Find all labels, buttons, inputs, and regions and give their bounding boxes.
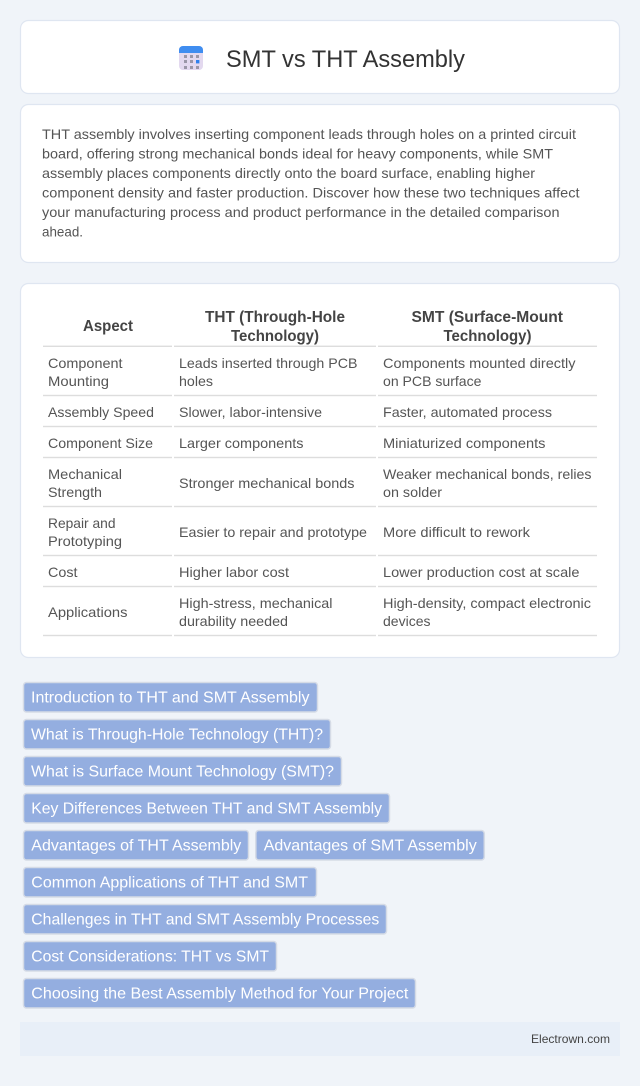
table row: mechanical strength: Strength — [48, 484, 102, 500]
text block: introduction paragraph: board, offering strong mechanical bonds ideal for heavy components, while SMT — [42, 146, 553, 162]
table row: repair and prototyping: More difficult to rework — [383, 524, 531, 540]
table row: repair and prototyping: Easier to repair and prototype — [179, 524, 367, 540]
table row: component size — [48, 435, 546, 451]
panel: introduction — [20, 104, 620, 262]
tag: introduction — [24, 682, 318, 712]
panel: comparison table — [20, 284, 620, 658]
table row: mechanical strength: Mechanical — [48, 466, 122, 482]
text block: introduction paragraph: component density and faster production. Discover how these two techniques affect — [42, 184, 580, 200]
text block: introduction paragraph: your manufacturing process and product performance in the detailed comparison — [42, 204, 560, 220]
table row: component size: Larger components — [179, 435, 304, 451]
table row: assembly speed: Faster, automated process — [383, 404, 552, 420]
tag: challenges — [24, 904, 386, 934]
table row: component mounting: Mounting — [48, 373, 109, 389]
table header row: SMT (Surface-Mount — [412, 309, 564, 326]
tag: what is SMT — [24, 756, 342, 786]
table row: mechanical strength — [48, 466, 592, 500]
table row: component size: Component Size — [48, 435, 153, 451]
footer: Electrown.com — [531, 1032, 610, 1046]
tag: introduction: Introduction to THT and SMT Assembly — [31, 690, 310, 706]
table row: mechanical strength: Weaker mechanical bonds, relies — [383, 466, 592, 482]
table row: component mounting: Leads inserted through PCB — [179, 355, 358, 371]
tag: advantages of THT — [24, 830, 248, 860]
table row: repair and prototyping: Prototyping — [48, 533, 122, 549]
table row: component mounting: Component — [48, 355, 123, 371]
table row: applications: durability needed — [179, 613, 288, 629]
table row: applications — [48, 595, 591, 629]
table row: applications: Applications — [48, 604, 128, 620]
table row: mechanical strength: Stronger mechanical bonds — [179, 475, 354, 491]
table row: component mounting: on PCB surface — [383, 373, 482, 389]
table row: repair and prototyping — [48, 515, 531, 549]
tag: what is SMT: What is Surface Mount Technology (SMT)? — [31, 764, 334, 780]
table row: cost: Cost — [48, 564, 78, 580]
table row: assembly speed — [48, 404, 552, 420]
tag: common applications — [24, 868, 316, 897]
tag: choosing the best method — [24, 978, 416, 1008]
title: SMT vs THT Assembly — [226, 46, 465, 73]
tag: key differences: Key Differences Between THT and SMT Assembly — [31, 800, 382, 818]
table row: component size: Miniaturized components — [383, 435, 546, 451]
text block: introduction paragraph — [42, 126, 580, 240]
table row: assembly speed: Assembly Speed — [48, 404, 154, 420]
icon: calendar grid — [179, 46, 203, 70]
tag: advantages of THT: Advantages of THT Assembly — [31, 838, 241, 854]
tag: key differences — [24, 794, 390, 823]
tag: choosing the best method: Choosing the Best Assembly Method for Your Project — [31, 986, 409, 1002]
table row: applications: devices — [383, 613, 430, 629]
table header row: THT (Through-Hole — [205, 309, 345, 326]
panel: section links — [24, 682, 484, 1008]
table row: cost: Higher labor cost — [179, 564, 289, 580]
text block: introduction paragraph: THT assembly involves inserting component leads through holes on a printed circuit — [42, 126, 576, 142]
table row: applications: High-density, compact electronic — [383, 595, 591, 611]
table row: mechanical strength: on solder — [383, 484, 442, 500]
tag: what is THT — [24, 720, 330, 749]
tag: common applications: Common Applications of THT and SMT — [31, 874, 308, 892]
footer — [20, 1022, 620, 1056]
table row: repair and prototyping: Repair and — [48, 515, 116, 531]
table row: cost — [48, 564, 580, 580]
table row: component mounting: Components mounted directly — [383, 355, 576, 371]
tag: advantages of SMT — [256, 830, 484, 860]
tag: cost considerations: Cost Considerations: THT vs SMT — [31, 948, 269, 966]
table row: cost: Lower production cost at scale — [383, 564, 580, 580]
table row: component mounting — [48, 355, 576, 389]
table header row — [83, 309, 564, 345]
panel: title card — [20, 20, 620, 94]
table header row: Technology) — [444, 328, 532, 345]
table header row: Technology) — [231, 328, 319, 345]
table row: assembly speed: Slower, labor-intensive — [179, 404, 322, 420]
tag: cost considerations — [24, 942, 276, 971]
table row: applications: High-stress, mechanical — [179, 595, 332, 611]
table row: component mounting: holes — [179, 373, 213, 389]
tag: what is THT: What is Through-Hole Technology (THT)? — [31, 726, 323, 744]
tag: challenges: Challenges in THT and SMT Assembly Processes — [31, 912, 379, 928]
text block: introduction paragraph: ahead. — [42, 224, 83, 240]
tag: advantages of SMT: Advantages of SMT Assembly — [264, 838, 477, 854]
table header row: Aspect — [83, 318, 134, 335]
text block: introduction paragraph: assembly places components directly onto the board surface, enabling higher — [42, 165, 535, 181]
